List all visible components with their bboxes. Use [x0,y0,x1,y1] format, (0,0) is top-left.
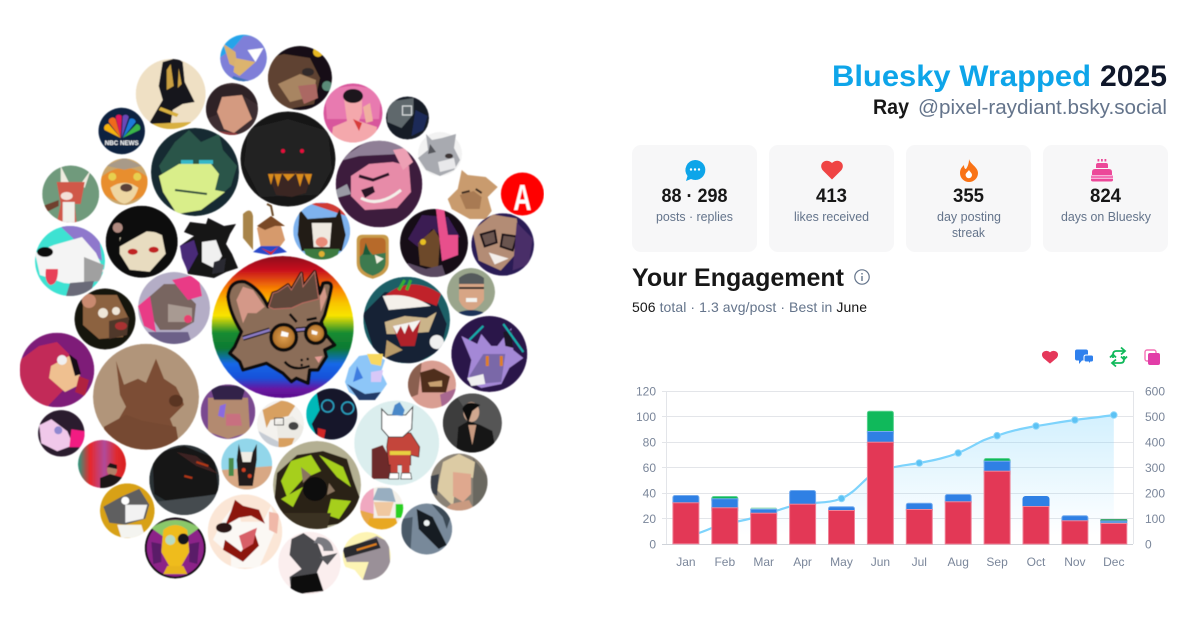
chart legend [1042,348,1160,366]
avatar: man with long hair [206,83,258,137]
avatar: white otter with glasses [256,400,304,448]
days label: days on Bluesky [1061,210,1152,224]
month labels: Dec [1103,555,1124,569]
posts value: 88 · 298 [662,186,728,207]
avatar: brown mustelid [74,288,136,350]
left axis labels: 120 [636,384,656,398]
cumulative line [686,415,1114,536]
avatar cluster [20,34,544,595]
avatar: boy with gold horn [243,204,287,255]
icon: heart [822,162,842,178]
avatar: brown wolf sketch [93,344,199,450]
cumulative area [686,415,1114,544]
bar: Jan [673,496,699,544]
avatar: smiling man with glasses [471,213,534,276]
avatar: pink bear [336,140,422,227]
right axis labels: 100 [1145,512,1165,526]
bar: Feb [712,496,738,544]
avatar: blonde woman [430,454,489,512]
left axis labels: 40 [643,486,656,500]
chart gridlines [662,391,1134,544]
bar: Nov [1062,516,1088,544]
title: year: 2025 [1100,60,1167,93]
right axis labels [1145,384,1165,552]
avatar: green dragon [151,128,239,216]
left axis labels: 0 [649,538,656,552]
month labels: Aug [948,555,969,569]
avatar: dark sphere [386,96,429,140]
avatar: purple-haired character with pink gun [400,209,468,277]
left axis labels [636,384,656,552]
avatar: person in black blazer [443,393,502,453]
avatar: green hooded figure [273,441,361,529]
left axis labels: 60 [643,461,656,475]
avatar: man before red gradient [78,440,126,488]
avatar: purple and black creature [180,218,238,278]
left axis labels: 100 [636,410,656,424]
avatar: goth girl [106,206,178,278]
likes value: 413 [816,186,847,207]
card: days on Bluesky [1043,145,1168,252]
user name: Ray [873,96,909,119]
bar: Jun [867,411,893,544]
avatar: hyena with pink mohawk [138,272,210,344]
bar: Aug [945,494,971,544]
avatar: brown creature on pink [408,360,456,408]
month labels: May [830,555,853,569]
avatar: small pink creature [37,409,85,457]
avatar: pink portrait [324,84,382,143]
card: posts and replies [632,145,757,252]
avatar: santa cat [354,400,439,486]
legend: likes [1042,351,1058,363]
chart: monthly engagement [636,384,1165,569]
avatar: dark helmet with shades [306,388,358,440]
month labels: Jan [676,555,696,569]
avatar: grey goat [278,532,341,595]
avatar: gas mask figure [145,518,206,578]
month labels: Mar [753,555,774,569]
month labels: Apr [793,555,812,569]
title: Bluesky Wrapped: Bluesky Wrapped [832,60,1091,93]
month labels: Jun [871,555,890,569]
avatar: red-haired dog [208,494,282,569]
avatar: grey wolf [418,132,462,176]
bar: Mar [751,508,777,544]
avatar: red fox [42,166,99,224]
days value: 824 [1090,186,1121,207]
user handle: @pixel-raydiant.bsky.social [918,97,1167,119]
icon: cake [1091,159,1113,182]
left axis labels: 80 [643,436,656,450]
title [832,60,1167,93]
bar: Apr [790,490,816,544]
bar: Oct [1022,496,1050,544]
avatar: tan dog [448,170,498,219]
avatar: NBC News [98,107,146,155]
legend: reposts [1110,348,1127,366]
avatar: christmas werewolf [363,277,450,364]
right axis labels: 500 [1145,410,1165,424]
likes label: likes received [794,210,869,224]
icon: info [855,270,869,284]
bar: Jul [906,503,932,544]
right axis labels: 300 [1145,461,1165,475]
avatar: man in glasses [447,268,495,318]
avatar: rainbow main character [212,256,354,398]
bar: May [828,507,854,544]
icon: flame [960,159,978,182]
rainbow character head [228,272,335,383]
legend: quotes [1145,350,1160,365]
avatar: white wolf on cyan [35,226,105,296]
month labels: Nov [1064,555,1086,569]
left axis labels: 20 [643,512,656,526]
right axis labels: 600 [1145,384,1165,398]
avatar: grey wolf on yellow [100,483,155,538]
avatar: blue falcon [220,34,268,82]
bar: Sep [984,458,1010,544]
avatar: red lion [20,333,94,407]
avatar: black jackal [136,58,206,130]
bar: Dec [1100,519,1127,544]
card: likes received [769,145,894,252]
heading: Your Engagement: Your Engagement [632,264,845,292]
avatar: purple scarred face [201,384,255,439]
streak label: streak [952,226,986,240]
month labels: Oct [1027,555,1046,569]
avatar: cactus desert cat [221,438,273,490]
icon: speech bubble [685,160,705,181]
avatar: grey dragon on yellow [343,532,391,580]
month labels: Sep [986,555,1008,569]
month labels: Jul [912,555,927,569]
avatar: green badge [357,235,389,279]
engagement summary: 506 total · 1.3 avg/post · Best in June [632,299,867,315]
avatar: black werewolf [240,112,336,206]
right axis labels: 0 [1145,538,1152,552]
avatar: tiger [100,158,148,206]
avatar: dark horse [401,503,453,554]
month labels: Feb [714,555,735,569]
streak label: day posting [937,210,1001,224]
legend: replies [1075,350,1094,364]
cumulative points [838,412,1117,502]
right axis labels: 400 [1145,436,1165,450]
avatar: red circle with A [501,172,544,218]
card: day posting streak [906,145,1031,252]
avatar: blue dog [345,354,387,400]
avatar: dark dragon [149,445,219,516]
posts label: posts · replies [656,210,733,224]
avatar: purple neon wolf [451,316,527,392]
avatar: black-haired dog with bell [293,202,350,261]
avatar: grinning bear [268,46,332,110]
bars [673,411,1127,544]
streak value: 355 [953,186,984,207]
streak label [937,210,1001,240]
avatar: red circle with A: A [513,177,531,218]
month labels [676,555,1124,569]
right axis labels: 200 [1145,486,1165,500]
NBC News wordmark: NBC NEWS [105,140,139,147]
avatar: pilot with flag [360,486,404,530]
